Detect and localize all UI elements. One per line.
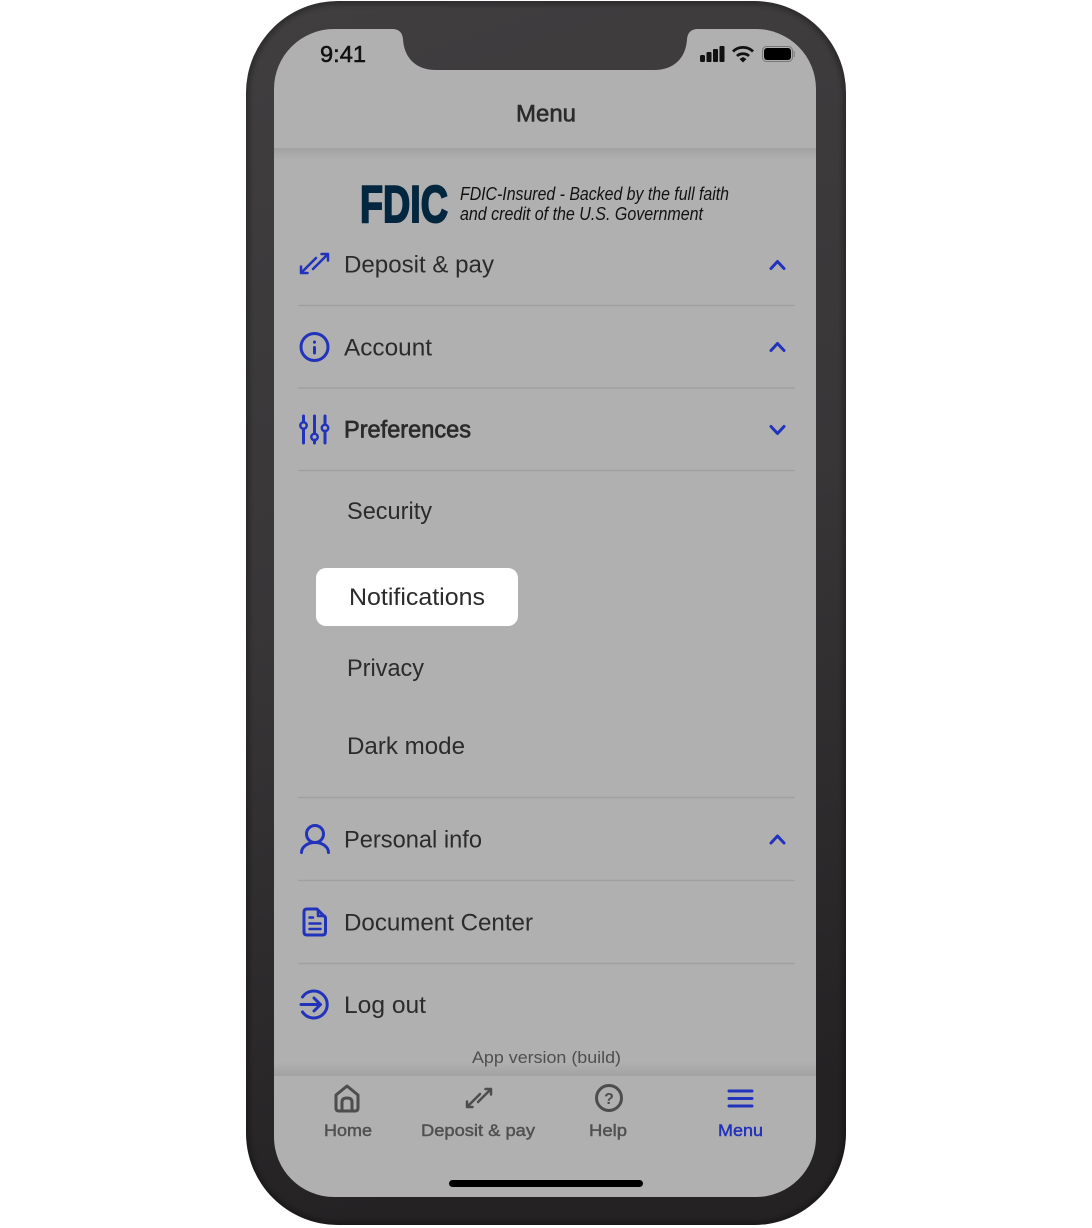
menu row: Preferences: Preferences	[344, 416, 471, 444]
menu row: Account: Account	[344, 334, 432, 362]
status bar	[320, 41, 795, 67]
tab bar	[324, 1086, 763, 1140]
phone screen	[274, 29, 816, 1197]
submenu: Dark mode: Dark mode	[347, 733, 465, 760]
menu row: Document Center: Document Center	[344, 910, 533, 936]
tab: Menu (active): Menu	[718, 1121, 763, 1140]
icon: signal	[700, 46, 724, 62]
FDIC statement: FDIC-Insured - Backed by the full faith	[460, 183, 729, 204]
chevron up	[771, 344, 784, 350]
header title: Menu	[516, 100, 576, 128]
chevron up	[771, 836, 784, 843]
menu row: Deposit & pay: Deposit & pay	[344, 252, 494, 278]
tab: Help	[589, 1086, 627, 1140]
icon: battery	[762, 46, 795, 62]
FDIC statement	[460, 183, 729, 224]
icon: document	[304, 909, 326, 935]
FDIC statement: and credit of the U.S. Government	[460, 203, 704, 224]
FDIC logo: FDIC	[360, 176, 448, 234]
phone bezel	[246, 1, 846, 1225]
tab: Home: Home	[324, 1121, 372, 1140]
icon: transfer arrows	[301, 254, 328, 273]
menu row: Preferences	[300, 416, 784, 444]
menu row: Deposit & pay	[301, 252, 784, 278]
tab bar shadow	[274, 1062, 816, 1076]
chevron up	[771, 262, 784, 268]
icon: person	[302, 826, 328, 852]
submenu: Privacy: Privacy	[347, 655, 424, 682]
tab: Deposit & pay	[421, 1089, 536, 1140]
chevron down	[771, 426, 784, 434]
header shadow	[274, 148, 816, 160]
icon: wifi	[733, 47, 753, 62]
dividers	[298, 306, 795, 964]
FDIC badge	[360, 176, 729, 234]
app version: App version (build)	[472, 1048, 621, 1067]
highlighted item: Notifications	[316, 568, 518, 626]
highlighted item: Notifications: Notifications	[349, 584, 485, 611]
menu row: Personal info	[302, 826, 784, 854]
tab: Menu (active)	[718, 1091, 763, 1140]
menu row: Account	[301, 334, 784, 362]
home indicator	[449, 1180, 643, 1187]
submenu: Security: Security	[347, 498, 432, 525]
icon: info	[301, 334, 328, 360]
time: 9:41	[320, 41, 366, 67]
icon: sliders	[300, 416, 328, 443]
menu row: Personal info: Personal info	[344, 826, 482, 854]
tab: Home	[324, 1086, 372, 1140]
tab: Help: Help	[589, 1121, 627, 1140]
menu row: Log out	[301, 991, 426, 1019]
icon: log out	[301, 991, 327, 1018]
tab: Deposit & pay: Deposit & pay	[421, 1121, 536, 1140]
menu row: Log out: Log out	[344, 992, 426, 1019]
tab: Help: ?	[604, 1091, 614, 1108]
